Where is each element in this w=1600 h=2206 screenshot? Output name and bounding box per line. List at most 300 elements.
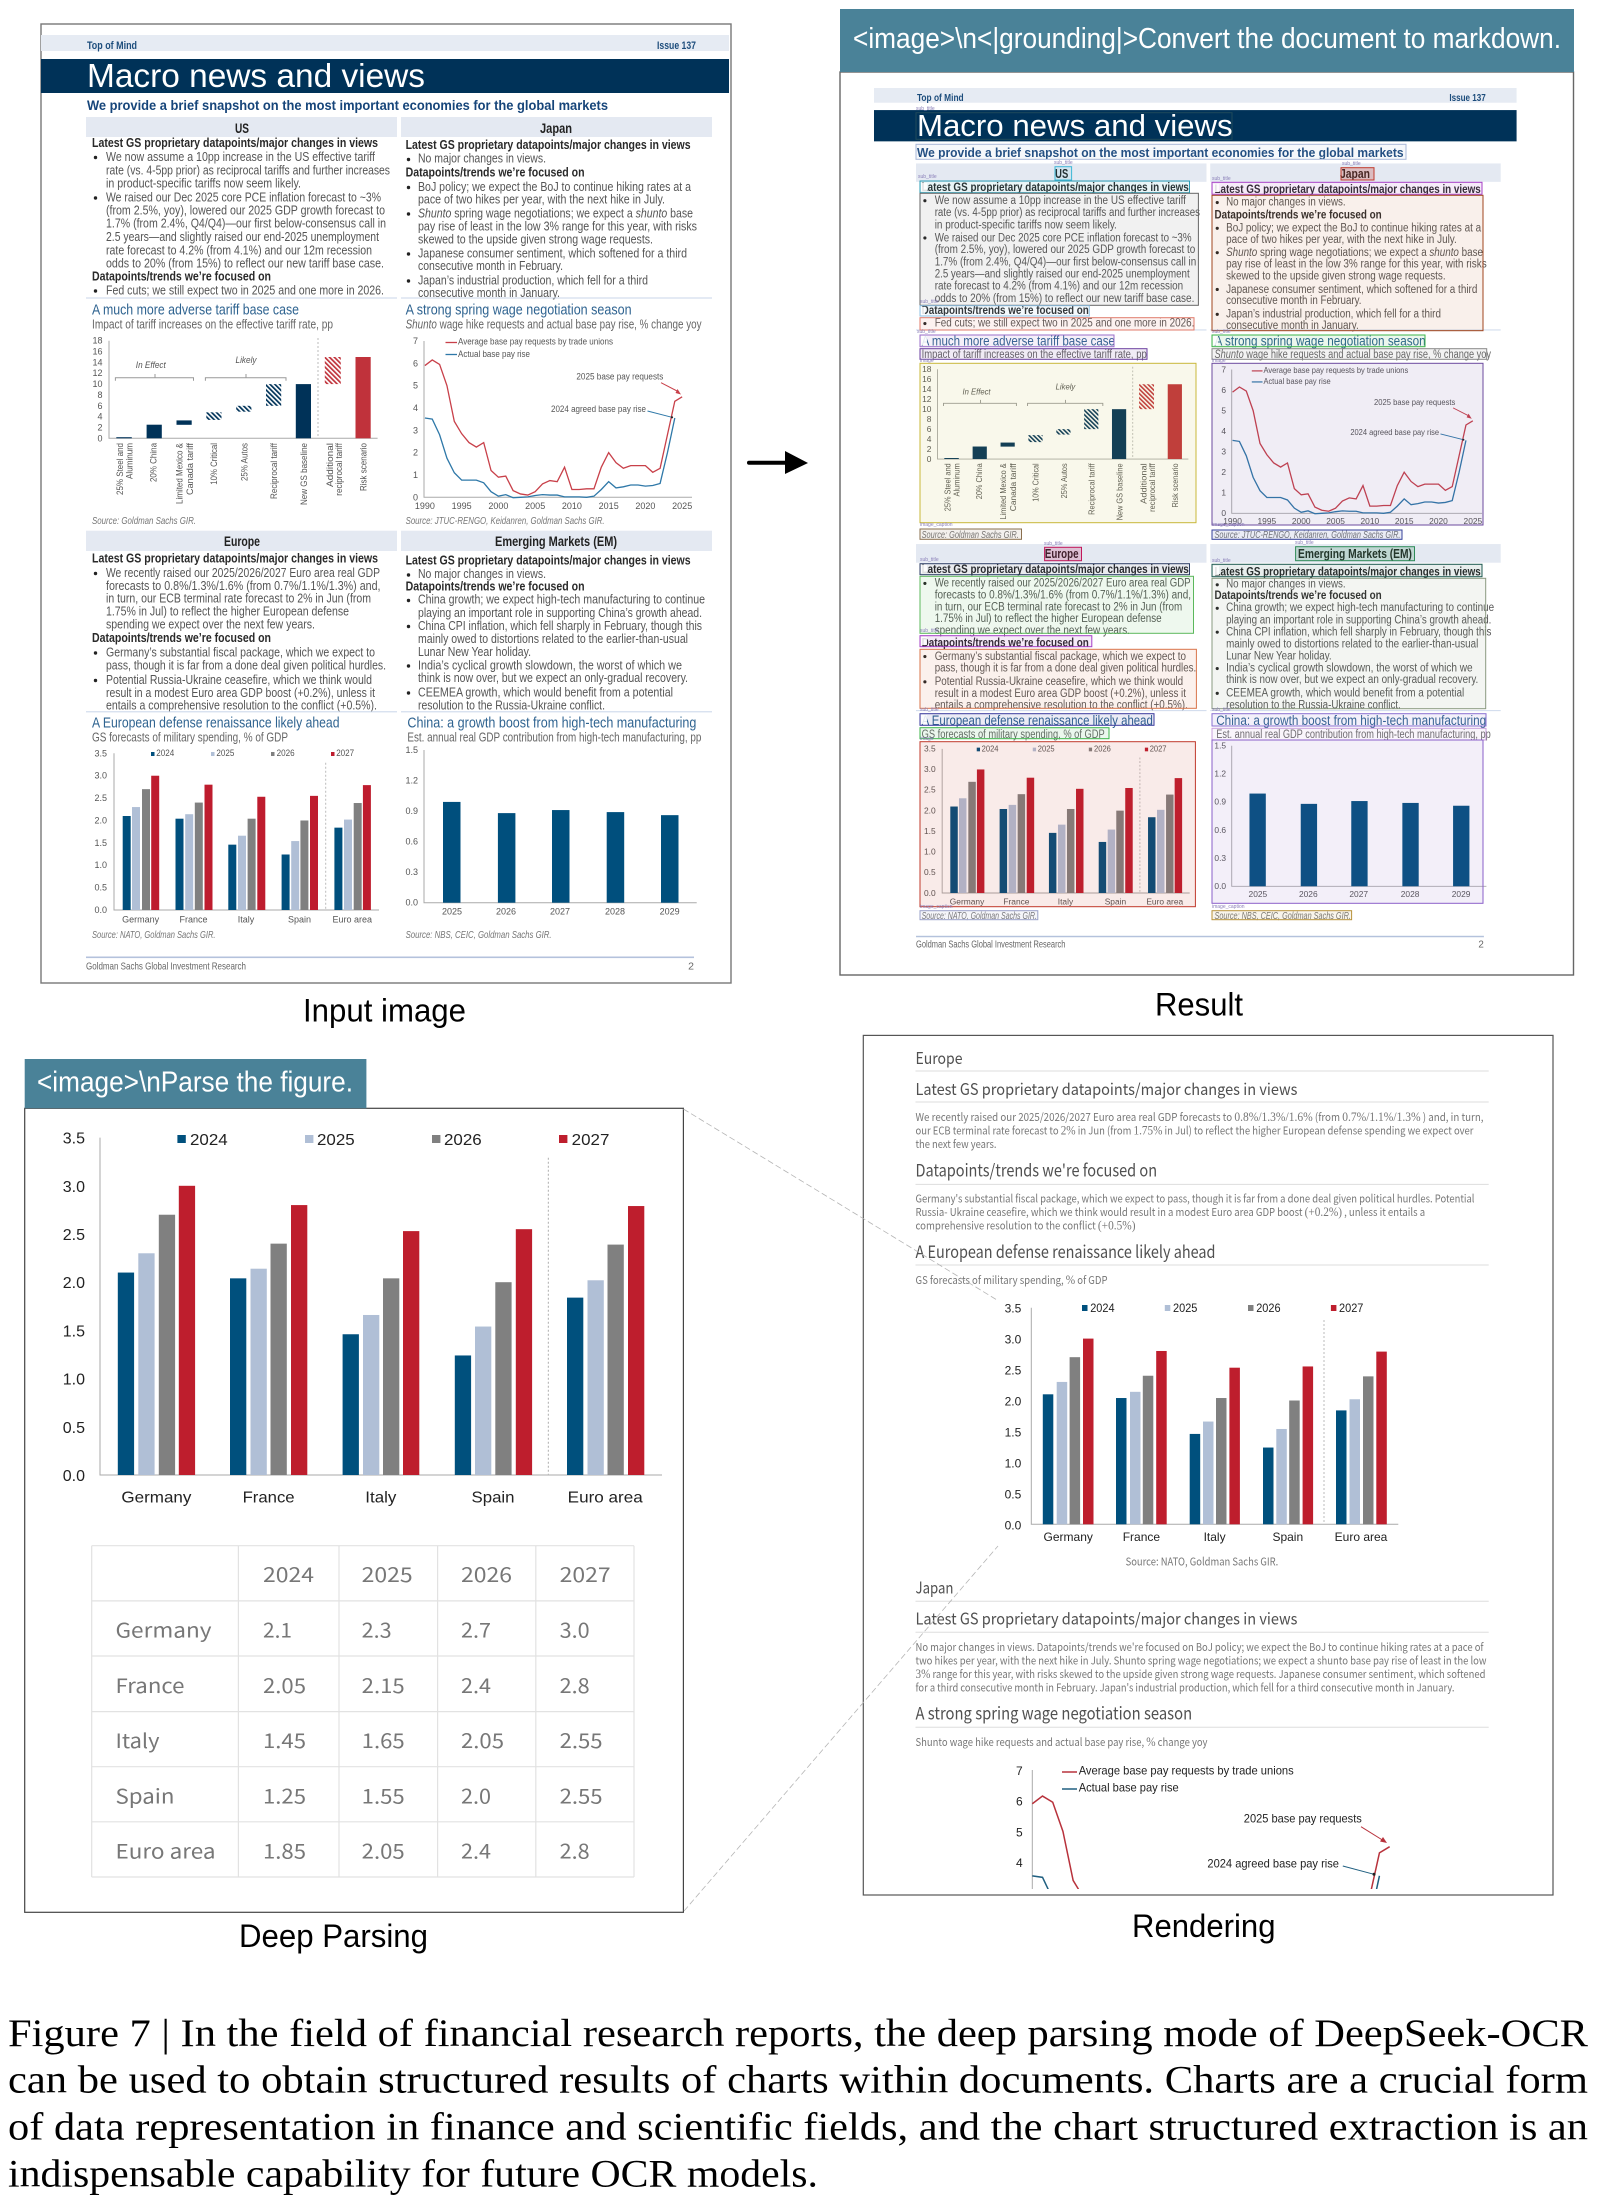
section: US: Fed cuts; we still expect two in 2025 and one more in 2026. bbox=[106, 282, 384, 297]
reconstructed document copy: Impact of tariff increases on the effective tariff rate, pp bbox=[922, 347, 1147, 361]
data table: 1.55 bbox=[362, 1780, 405, 1809]
reconstructed document copy: Germany’s substantial fiscal package, which we expect to bbox=[935, 649, 1186, 663]
section: Emerging Markets: Lunar New Year holiday. bbox=[418, 644, 531, 659]
reconstructed document copy: 2025 base pay requests bbox=[1374, 397, 1455, 407]
grounding box tags: sub_title bbox=[1212, 707, 1231, 713]
arrow: input to result bbox=[749, 451, 808, 474]
chart: China high-tech growth: 1.5 bbox=[405, 745, 418, 755]
reconstructed document copy: No major changes in views. bbox=[1226, 577, 1346, 591]
grounding box tags: sub_title bbox=[1212, 558, 1231, 564]
chart: spring wage negotiation: 2015 bbox=[599, 501, 619, 511]
grounding box tags: image bbox=[1212, 358, 1226, 364]
reconstructed document copy: 1990 bbox=[1223, 516, 1242, 526]
line chart: rendered wage negotiation: 4 bbox=[1016, 1856, 1023, 1870]
reconstructed document copy: spending we expect over the next few years. bbox=[935, 623, 1130, 637]
data table: 2.8 bbox=[560, 1836, 590, 1865]
caption: Rendering: Rendering bbox=[1132, 1908, 1276, 1944]
grounding box tags: image bbox=[920, 736, 934, 742]
grounding box tags: sub_title bbox=[1295, 540, 1314, 546]
reconstructed document copy: 7 bbox=[1221, 364, 1226, 374]
title banner: Macro news and views bbox=[87, 57, 425, 94]
section: Japan: Japanese consumer sentiment, which softened for a third bbox=[418, 246, 687, 261]
grounding box tags: sub_title bbox=[917, 329, 936, 335]
chart: spring wage negotiation: 2025 bbox=[672, 501, 692, 511]
section: US: 1.7% (from 2.4%, Q4/Q4)—our first below-consensus call in bbox=[106, 216, 386, 231]
Japan markdown section: two hikes per year, with the next hike in July. Shunto spring wage negotiations; we expect a shunto base pay rise of least in the low bbox=[916, 1653, 1487, 1669]
Japan markdown section: A strong spring wage negotiation season bbox=[916, 1699, 1192, 1724]
section: Europe: Europe bbox=[224, 533, 260, 549]
reconstructed document copy: We provide a brief snapshot on the most important economies for the global markets bbox=[917, 145, 1404, 160]
reconstructed document copy: 2015 bbox=[1395, 516, 1414, 526]
chart: European defense spending: 2026 bbox=[277, 748, 295, 758]
reconstructed document copy: entails a comprehensive resolution to the conflict (+0.5%). bbox=[935, 698, 1188, 712]
reconstructed document copy: Euro area bbox=[1146, 896, 1184, 906]
reconstructed document copy: consecutive month in February. bbox=[1226, 293, 1362, 307]
chart: China high-tech growth: Source: NBS, CEIC, Goldman Sachs GIR. bbox=[406, 929, 552, 941]
reconstructed document copy: Risk scenario bbox=[1170, 463, 1180, 508]
chart: spring wage negotiation: 2 bbox=[413, 448, 418, 458]
chart: spring wage negotiation: 1 bbox=[413, 470, 418, 480]
section: Japan bbox=[401, 117, 712, 300]
figure caption: of data representation in finance and scientific fields, and the chart structured extraction is an bbox=[8, 2105, 1588, 2148]
bar chart: rendered military spending: 2027 bbox=[1339, 1301, 1364, 1315]
reconstructed document copy: 10 bbox=[922, 404, 932, 414]
reconstructed document copy: Emerging Markets (EM) bbox=[1298, 546, 1412, 561]
reconstructed document copy: 12 bbox=[922, 394, 932, 404]
reconstructed document copy: 2027 bbox=[1150, 743, 1167, 753]
chart: China high-tech growth: 0.3 bbox=[405, 867, 418, 877]
reconstructed document copy: in turn, our ECB terminal rate forecast to 2% in Jun (from bbox=[935, 599, 1182, 613]
bar chart: rendered military spending: Source: NATO, Goldman Sachs GIR. bbox=[1126, 1553, 1278, 1569]
section: Japan: Datapoints/trends we’re focused on bbox=[406, 165, 585, 180]
line chart: rendered wage negotiation: 6 bbox=[1016, 1795, 1023, 1809]
reconstructed document copy: 2 bbox=[1221, 467, 1226, 477]
reconstructed document copy: Source: JTUC-RENGO, Keidanren, Goldman Sachs GIR. bbox=[1215, 530, 1400, 541]
grounding box tags: sub_title bbox=[1342, 161, 1361, 167]
section: Japan: consecutive month in February. bbox=[418, 258, 563, 273]
Europe markdown section: Europe bbox=[916, 1045, 963, 1069]
reconstructed document copy: 1.7% (from 2.4%, Q4/Q4)—our first below-consensus call in bbox=[935, 254, 1196, 268]
section: Japan: Japan’s industrial production, which fell for a third bbox=[418, 272, 648, 287]
panel: input image document bbox=[41, 24, 731, 983]
bar chart: parsed military spending: France bbox=[243, 1490, 295, 1507]
section: US: odds to 20% (from 15%) to reflect our new tariff base case. bbox=[106, 256, 384, 271]
page footer bbox=[86, 956, 694, 972]
bar chart: parsed military spending bbox=[63, 1131, 662, 1507]
reconstructed document copy: Japanese consumer sentiment, which softened for a third bbox=[1226, 282, 1477, 296]
reconstructed document copy: 2024 agreed base pay rise bbox=[1350, 427, 1439, 437]
reconstructed document copy: 0.9 bbox=[1214, 797, 1226, 807]
caption: Result: Result bbox=[1155, 986, 1243, 1022]
reconstructed document copy: 2010 bbox=[1361, 516, 1380, 526]
chart: spring wage negotiation bbox=[406, 302, 702, 527]
chart: spring wage negotiation: A strong spring wage negotiation season bbox=[406, 302, 632, 319]
bar chart: rendered military spending: 2026 bbox=[1256, 1301, 1281, 1315]
reconstructed document copy: pass, though it is far from a done deal given political hurdles. bbox=[935, 661, 1196, 675]
reconstructed document copy: rate (vs. 4-5pp prior) as reciprocal tariffs and further increases bbox=[935, 205, 1200, 219]
data table: 2.55 bbox=[560, 1725, 603, 1754]
section: US: 2.5 years—and slightly raised our end-2025 unemployment bbox=[106, 229, 379, 244]
chart: tariff base case: Likely bbox=[236, 355, 257, 365]
data table: 3.0 bbox=[560, 1615, 590, 1644]
bar chart: parsed military spending: 2024 bbox=[190, 1132, 228, 1149]
chart: tariff base case: 20% China bbox=[149, 443, 159, 482]
caption: Input image: Input image bbox=[303, 993, 466, 1029]
grounding box tags: image_caption bbox=[1212, 522, 1245, 528]
section: Emerging Markets: China growth; we expect high-tech manufacturing to continue bbox=[418, 592, 705, 607]
data table: 2.4 bbox=[461, 1836, 491, 1865]
panel: deep parsing bbox=[25, 1059, 683, 1912]
section: US: We raised our Dec 2025 core PCE inflation forecast to ~3% bbox=[106, 190, 381, 205]
section: Emerging Markets: Emerging Markets (EM) bbox=[495, 533, 617, 549]
reconstructed document copy: US bbox=[1055, 166, 1069, 181]
reconstructed document copy: 3.5 bbox=[924, 744, 936, 754]
section: US: rate (vs. 4-5pp prior) as reciprocal tariffs and further increases bbox=[106, 162, 390, 177]
bar chart: rendered military spending: 3.0 bbox=[1005, 1333, 1022, 1347]
grounding box tags: sub_title bbox=[918, 174, 937, 180]
reconstructed document copy: 0.0 bbox=[1214, 881, 1226, 891]
data table: 2.1 bbox=[263, 1615, 292, 1644]
reconstructed document copy: China CPI inflation, which fell sharply in February, though this bbox=[1226, 624, 1491, 638]
reconstructed document copy: Est. annual real GDP contribution from high-tech manufacturing, pp bbox=[1216, 727, 1491, 741]
bar chart: parsed military spending: Euro area bbox=[568, 1490, 643, 1507]
reconstructed document copy: Additional bbox=[1139, 463, 1149, 504]
prompt header: parse the figure: <image>\nParse the figure. bbox=[37, 1067, 353, 1099]
reconstructed document copy: In Effect bbox=[963, 386, 991, 396]
reconstructed document copy: 20% China bbox=[974, 463, 984, 499]
reconstructed document copy: 1 bbox=[1221, 488, 1226, 498]
chart: China high-tech growth: 1.2 bbox=[405, 775, 418, 785]
reconstructed document copy: 25% Autos bbox=[1059, 463, 1069, 498]
reconstructed document copy: Datapoints/trends we’re focused on bbox=[922, 303, 1089, 317]
chart: European defense spending: 1.0 bbox=[94, 860, 107, 870]
reconstructed document copy: China growth; we expect high-tech manufacturing to continue bbox=[1226, 600, 1494, 614]
chart: spring wage negotiation: Actual base pay rise bbox=[458, 349, 530, 359]
reconstructed document copy: 2029 bbox=[1452, 889, 1471, 899]
chart: China high-tech growth: 2028 bbox=[605, 906, 625, 916]
bar chart: parsed military spending: Germany bbox=[121, 1490, 191, 1507]
section: Europe: Potential Russia-Ukraine ceasefire, which we think would bbox=[106, 672, 372, 687]
grounding box tags: sub_title bbox=[1212, 176, 1231, 182]
reconstructed document copy: 2 bbox=[1478, 940, 1484, 951]
section: Emerging Markets: No major changes in views. bbox=[418, 566, 546, 581]
reconstructed document copy: 2.0 bbox=[924, 805, 936, 815]
reconstructed document copy: 2028 bbox=[1401, 889, 1420, 899]
section: Emerging Markets bbox=[401, 531, 712, 713]
reconstructed document copy: A European defense renaissance likely ahead bbox=[922, 712, 1153, 728]
chart: European defense spending: 2024 bbox=[156, 748, 174, 758]
reconstructed document copy: Source: NBS, CEIC, Goldman Sachs GIR. bbox=[1215, 911, 1351, 922]
chart: European defense spending: 2027 bbox=[336, 748, 354, 758]
chart: spring wage negotiation: Average base pay requests by trade unions bbox=[458, 337, 613, 347]
data table: 1.45 bbox=[263, 1725, 306, 1754]
bar chart: rendered military spending: 2024 bbox=[1090, 1301, 1115, 1315]
reconstructed document copy bbox=[874, 88, 1517, 951]
chart: spring wage negotiation: 2005 bbox=[525, 501, 545, 511]
chart: tariff base case: reciprocal tariff bbox=[334, 443, 344, 496]
bar chart: parsed military spending: 0.0 bbox=[63, 1468, 85, 1485]
reconstructed document copy: 2025 bbox=[1249, 889, 1268, 899]
reconstructed document copy: playing an important role in supporting China’s growth ahead. bbox=[1226, 613, 1491, 626]
chart: European defense spending: Euro area bbox=[333, 914, 372, 924]
bar chart: parsed military spending: 1.0 bbox=[63, 1372, 85, 1389]
reconstructed document copy: Latest GS proprietary datapoints/major changes in views bbox=[922, 562, 1189, 576]
reconstructed document copy: Spain bbox=[1105, 896, 1127, 906]
bar chart: parsed military spending: 2026 bbox=[444, 1132, 482, 1149]
grounding box tags: image_caption bbox=[1212, 904, 1245, 910]
bar chart: parsed military spending: Italy bbox=[365, 1490, 396, 1507]
chart: European defense spending: Germany bbox=[122, 914, 160, 924]
section: US: Datapoints/trends we’re focused on bbox=[92, 269, 271, 284]
section: Europe: in turn, our ECB terminal rate forecast to 2% in Jun (from bbox=[106, 591, 371, 606]
chart: tariff base case: 8 bbox=[97, 390, 102, 400]
chart: spring wage negotiation: 2000 bbox=[488, 501, 508, 511]
reconstructed document copy: A strong spring wage negotiation season bbox=[1215, 332, 1426, 348]
subtitle: We provide a brief snapshot on the most important economies for the global markets bbox=[87, 97, 608, 113]
chart: tariff base case: Reciprocal tariff bbox=[269, 443, 279, 499]
connector: dashed zoom lines bbox=[683, 1109, 998, 1911]
section: US: We now assume a 10pp increase in the US effective tariff bbox=[106, 149, 375, 164]
line chart: rendered wage negotiation: Actual base pay rise bbox=[1079, 1781, 1179, 1795]
reconstructed document copy: 0.0 bbox=[924, 888, 936, 898]
reconstructed document copy: 2026 bbox=[1094, 743, 1111, 753]
reconstructed document copy: think is now over, but we expect an only-gradual recovery. bbox=[1226, 672, 1478, 686]
reconstructed document copy: resolution to the Russia-Ukraine conflict. bbox=[1226, 698, 1401, 712]
bar chart: rendered military spending: 1.0 bbox=[1005, 1456, 1022, 1470]
reconstructed document copy: 10% Critical bbox=[1030, 463, 1040, 502]
section: Japan: No major changes in views. bbox=[418, 151, 546, 166]
reconstructed document copy: 2020 bbox=[1429, 516, 1448, 526]
chart: tariff base case: Impact of tariff increases on the effective tariff rate, pp bbox=[92, 317, 333, 332]
reconstructed document copy: 25% Steel and bbox=[943, 463, 953, 511]
reconstructed document copy: We raised our Dec 2025 core PCE inflation forecast to ~3% bbox=[935, 230, 1192, 244]
reconstructed document copy: Shunto spring wage negotiations; we expect a shunto base bbox=[1226, 245, 1483, 259]
reconstructed document copy: rate forecast to 4.2% (from 4.1%) and our 12m recession bbox=[935, 279, 1183, 293]
section: Europe: entails a comprehensive resolution to the conflict (+0.5%). bbox=[106, 698, 377, 713]
reconstructed document copy: We now assume a 10pp increase in the US effective tariff bbox=[935, 193, 1186, 207]
reconstructed document copy: 0.3 bbox=[1214, 853, 1226, 863]
reconstructed document copy: 1.5 bbox=[924, 826, 936, 836]
reconstructed document copy: Japan bbox=[1340, 166, 1370, 181]
bar chart: parsed military spending: 2027 bbox=[572, 1132, 610, 1149]
reconstructed document copy: mainly owed to distortions related to the earlier-than-usual bbox=[1226, 636, 1478, 650]
caption: Deep Parsing: Deep Parsing bbox=[239, 1918, 428, 1954]
chart: spring wage negotiation: 4 bbox=[413, 403, 418, 413]
chart: European defense spending: 0.5 bbox=[94, 883, 107, 893]
reconstructed document copy: Latest GS proprietary datapoints/major changes in views bbox=[922, 180, 1189, 194]
panel: result with grounding boxes bbox=[840, 9, 1574, 975]
reconstructed document copy: forecasts to 0.8%/1.3%/1.6% (from 0.7%/1.1%/1.3%) and, bbox=[935, 588, 1191, 602]
data table: 2.05 bbox=[263, 1670, 306, 1699]
chart: China high-tech growth: 0.9 bbox=[405, 806, 418, 816]
chart: European defense spending: 2025 bbox=[216, 748, 234, 758]
reconstructed document copy: CEEMEA growth, which would benefit from a potential bbox=[1226, 685, 1464, 699]
title banner bbox=[41, 57, 729, 94]
document content: input bbox=[41, 35, 729, 972]
section: Japan: consecutive month in January. bbox=[418, 285, 560, 300]
chart: tariff base case: 10% Critical bbox=[209, 443, 219, 485]
section: Emerging Markets: resolution to the Russia-Ukraine conflict. bbox=[418, 698, 605, 713]
reconstructed document copy: India’s cyclical growth slowdown, the worst of which we bbox=[1226, 661, 1473, 675]
reconstructed document copy: 16 bbox=[922, 374, 932, 384]
chart: European defense spending: 2.0 bbox=[94, 816, 107, 826]
reconstructed document copy: BoJ policy; we expect the BoJ to continue hiking rates at a bbox=[1226, 221, 1481, 234]
reconstructed document copy: 6 bbox=[927, 424, 932, 434]
section: Europe: Datapoints/trends we’re focused on bbox=[92, 630, 271, 645]
reconstructed document copy: Fed cuts; we still expect two in 2025 and one more in 2026. bbox=[935, 316, 1194, 330]
chart: China high-tech growth: 2027 bbox=[550, 906, 570, 916]
chart: spring wage negotiation: 1990 bbox=[415, 501, 435, 511]
Japan markdown section: for a third consecutive month in February. Japan's industrial production, which fell for a third consecutive month in January. bbox=[916, 1679, 1454, 1695]
line chart: rendered wage negotiation bbox=[1016, 1766, 1390, 1889]
reconstructed document copy: reciprocal tariff bbox=[1147, 463, 1157, 512]
section: Emerging Markets: Latest GS proprietary datapoints/major changes in views bbox=[406, 553, 691, 568]
reconstructed document copy: 8 bbox=[927, 414, 932, 424]
chart: tariff base case: Risk scenario bbox=[358, 443, 368, 491]
data table: 1.65 bbox=[362, 1725, 405, 1754]
chart: tariff base case: 14 bbox=[92, 357, 102, 367]
grounding box tags: sub_title bbox=[1212, 329, 1231, 335]
chart: spring wage negotiation: 7 bbox=[413, 336, 418, 346]
data table: France bbox=[116, 1670, 184, 1699]
bar chart: rendered military spending: Spain bbox=[1272, 1530, 1303, 1544]
chart: European defense spending: 2.5 bbox=[94, 793, 107, 803]
chart: spring wage negotiation: 5 bbox=[413, 381, 418, 391]
section: Emerging Markets: think is now over, but we expect an only-gradual recovery. bbox=[418, 670, 688, 685]
line chart: rendered wage negotiation: Average base pay requests by trade unions bbox=[1079, 1763, 1294, 1777]
data table: 2025 bbox=[362, 1559, 413, 1588]
chart: tariff base case: 2 bbox=[97, 422, 102, 432]
chart: tariff base case: 12 bbox=[92, 368, 102, 378]
reconstructed document copy: 0.5 bbox=[924, 867, 936, 877]
chart: European defense spending: 3.5 bbox=[94, 748, 107, 758]
reconstructed document copy: 2.5 bbox=[924, 785, 936, 795]
reconstructed document copy: 2027 bbox=[1349, 889, 1368, 899]
grounding box tags: sub_title bbox=[1044, 541, 1063, 547]
chart: tariff base case: 0 bbox=[97, 433, 102, 443]
bar chart: rendered military spending: 2.0 bbox=[1005, 1394, 1022, 1408]
bar chart: rendered military spending: 2025 bbox=[1173, 1301, 1198, 1315]
reconstructed document copy: Datapoints/trends we’re focused on bbox=[1215, 207, 1382, 221]
reconstructed document copy: Limited Mexico & bbox=[998, 463, 1008, 519]
reconstructed document copy: We recently raised our 2025/2026/2027 Euro area real GDP bbox=[935, 576, 1191, 590]
grounding box tags: sub_title bbox=[920, 557, 939, 563]
header band: Top of Mind bbox=[87, 40, 137, 52]
section: US: (from 2.5%, yoy), lowered our 2025 GDP growth forecast to bbox=[106, 202, 385, 217]
reconstructed document copy: Italy bbox=[1058, 896, 1074, 906]
section: Emerging Markets: CEEMEA growth, which would benefit from a potential bbox=[418, 684, 673, 699]
reconstructed document copy: 0 bbox=[1221, 508, 1226, 518]
bar chart: rendered military spending: France bbox=[1123, 1530, 1160, 1544]
reconstructed document copy: Datapoints/trends we’re focused on bbox=[922, 636, 1089, 649]
reconstructed document copy: A much more adverse tariff base case bbox=[922, 332, 1115, 348]
data table: 2.7 bbox=[461, 1615, 491, 1644]
reconstructed document copy: skewed to the upside given strong wage requests. bbox=[1226, 269, 1446, 283]
chart: spring wage negotiation: 2020 bbox=[635, 501, 655, 511]
bar chart: rendered military spending: Italy bbox=[1204, 1530, 1226, 1544]
reconstructed document copy: 2005 bbox=[1326, 516, 1345, 526]
reconstructed document copy: result in a modest Euro area GDP boost (+0.2%), unless it bbox=[935, 686, 1186, 700]
chart: tariff base case: In Effect bbox=[136, 360, 166, 370]
section: Europe: We recently raised our 2025/2026/2027 Euro area real GDP bbox=[106, 565, 380, 580]
section: Emerging Markets: mainly owed to distortions related to the earlier-than-usual bbox=[418, 631, 688, 646]
chart: tariff base case: 16 bbox=[92, 346, 102, 356]
section: US: in product-specific tariffs now seem likely. bbox=[106, 176, 301, 191]
data table: 2.4 bbox=[461, 1670, 491, 1699]
reconstructed document copy: 0.6 bbox=[1214, 825, 1226, 835]
chart: European defense spending: France bbox=[179, 914, 208, 924]
bar chart: parsed military spending: Spain bbox=[472, 1490, 514, 1507]
reconstructed document copy: 3 bbox=[1221, 446, 1226, 456]
reconstructed document copy: No major changes in views. bbox=[1226, 195, 1346, 208]
chart: spring wage negotiation: 2010 bbox=[562, 501, 582, 511]
chart: tariff base case: 10 bbox=[92, 379, 102, 389]
line chart: rendered wage negotiation: 2025 base pay requests bbox=[1244, 1812, 1362, 1826]
data table: Spain bbox=[116, 1780, 174, 1809]
figure caption: Figure 7 | In the field of financial research reports, the deep parsing mode of DeepSeek-OCR bbox=[8, 2012, 1588, 2055]
Japan markdown section bbox=[916, 1574, 1489, 1750]
Europe markdown section: Germany's substantial fiscal package, which we expect to pass, though it is far from a done deal given political hurdles. Potential bbox=[916, 1191, 1474, 1207]
bar chart: rendered military spending: Germany bbox=[1044, 1530, 1093, 1544]
Europe markdown section: GS forecasts of military spending, % of GDP bbox=[916, 1272, 1108, 1288]
bar chart: parsed military spending: 1.5 bbox=[63, 1323, 85, 1340]
chart: European defense spending: Source: NATO, Goldman Sachs GIR. bbox=[92, 929, 216, 941]
reconstructed document copy: Potential Russia-Ukraine ceasefire, which we think would bbox=[935, 674, 1183, 688]
data table: Euro area bbox=[116, 1836, 216, 1865]
reconstructed document copy: Actual base pay rise bbox=[1263, 376, 1331, 386]
chart: China high-tech growth: 2026 bbox=[496, 906, 516, 916]
chart: spring wage negotiation: 1995 bbox=[452, 501, 472, 511]
reconstructed document copy: Macro news and views bbox=[917, 109, 1233, 143]
reconstructed document copy: Issue 137 bbox=[1449, 93, 1486, 104]
reconstructed document copy: Likely bbox=[1056, 382, 1076, 392]
reconstructed document copy: Lunar New Year holiday. bbox=[1226, 648, 1332, 662]
section: Emerging Markets: playing an important role in supporting China’s growth ahead. bbox=[418, 605, 702, 620]
reconstructed document copy: 1995 bbox=[1257, 516, 1277, 526]
reconstructed document copy: 1.5 bbox=[1214, 741, 1226, 751]
data table: Italy bbox=[116, 1725, 160, 1754]
reconstructed document copy: Source: Goldman Sachs GIR. bbox=[922, 530, 1019, 541]
reconstructed document copy: 2025 bbox=[1464, 516, 1483, 526]
reconstructed document copy: 18 bbox=[922, 364, 932, 374]
chart: China high-tech growth: 2025 bbox=[442, 906, 462, 916]
bar chart: rendered military spending: 3.5 bbox=[1005, 1302, 1022, 1316]
reconstructed document copy: Aluminum bbox=[951, 463, 961, 496]
Japan markdown section: No major changes in views. Datapoints/trends we're focused on BoJ policy; we expect the BoJ to continue hiking rates at a pace of bbox=[916, 1639, 1484, 1655]
Europe markdown section: We recently raised our 2025/2026/2027 Euro area real GDP forecasts to 0.8%/1.3%/1.6% (from 0.7%/1.1%/1.3% ) and, in turn, bbox=[916, 1109, 1484, 1125]
data table: 2.55 bbox=[560, 1780, 603, 1809]
section: Europe: 1.75% in Jul) to reflect the higher European defense bbox=[106, 603, 349, 618]
chart: tariff base case: Canada tariff bbox=[185, 443, 195, 495]
grounding box tags: sub_title bbox=[920, 707, 939, 713]
grounding box tags: sub_title bbox=[920, 299, 939, 305]
chart: European defense spending: Spain bbox=[288, 914, 311, 924]
reconstructed document copy: Shunto wage hike requests and actual base pay rise, % change yoy bbox=[1215, 347, 1491, 361]
data table: 2027 bbox=[560, 1559, 611, 1588]
chart: spring wage negotiation: 3 bbox=[413, 425, 418, 435]
chart: tariff base case: New GS baseline bbox=[299, 443, 309, 505]
chart: China high-tech growth: China: a growth boost from high-tech manufacturing bbox=[407, 714, 696, 731]
data table: 2.0 bbox=[461, 1780, 491, 1809]
bar chart: parsed military spending: 3.0 bbox=[63, 1179, 85, 1196]
chart: tariff base case: 4 bbox=[97, 412, 102, 422]
grounding box tags: image_caption bbox=[920, 904, 953, 910]
Japan markdown section: Shunto wage hike requests and actual base pay rise, % change yoy bbox=[916, 1734, 1208, 1750]
section: Japan: BoJ policy; we expect the BoJ to continue hiking rates at a bbox=[418, 179, 692, 194]
chart: European defense spending: 0.0 bbox=[94, 905, 107, 915]
data table: 2.8 bbox=[560, 1670, 590, 1699]
chart: spring wage negotiation: 2024 agreed base pay rise bbox=[551, 404, 646, 414]
